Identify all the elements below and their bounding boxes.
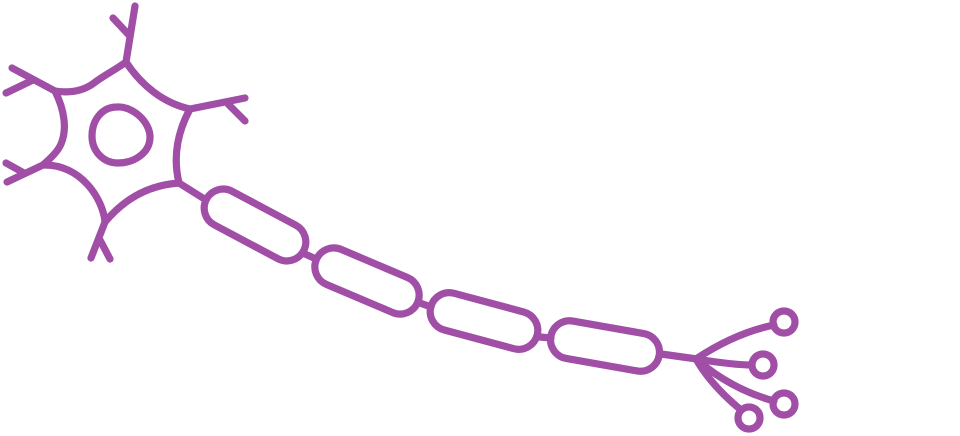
dendrite: right bbox=[190, 98, 245, 121]
axon segments bbox=[179, 183, 697, 359]
myelin sheath 4 bbox=[548, 318, 662, 374]
axon terminal branches bbox=[696, 325, 774, 410]
dendrite: upper left bbox=[6, 68, 55, 93]
myelin sheath 2 bbox=[309, 242, 425, 320]
synaptic terminal 1 bbox=[773, 311, 795, 333]
dendrite: bottom bbox=[91, 222, 110, 259]
synaptic terminal 2 bbox=[752, 354, 774, 376]
cell body outline bbox=[43, 62, 190, 222]
dendrite: lower left bbox=[6, 163, 43, 182]
nucleus bbox=[92, 107, 150, 163]
dendrite: top bbox=[113, 6, 135, 62]
myelin sheath 3 bbox=[426, 288, 542, 354]
synaptic terminal 3 bbox=[773, 393, 795, 415]
synaptic terminal 4 bbox=[738, 407, 760, 429]
myelin sheath 1 bbox=[198, 182, 312, 268]
